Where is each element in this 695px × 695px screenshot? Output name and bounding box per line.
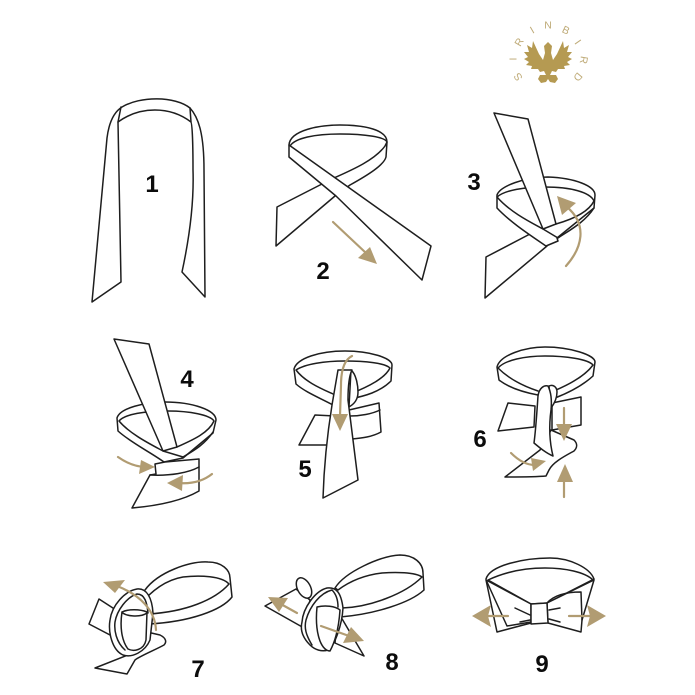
logo wordmark: S bbox=[512, 70, 525, 83]
step 5 bbox=[294, 351, 392, 498]
logo wordmark bbox=[508, 20, 590, 84]
outer ring bbox=[301, 588, 343, 651]
outer ring bbox=[110, 589, 153, 656]
loop behind strip bbox=[349, 370, 358, 407]
logo wordmark: D bbox=[570, 70, 585, 84]
upward strip bbox=[114, 339, 177, 451]
hanging strip bbox=[323, 370, 358, 498]
logo wordmark: I bbox=[528, 25, 537, 37]
step 2 bbox=[276, 125, 431, 285]
logo: Sirinbird bbox=[508, 20, 590, 84]
right wing creases bbox=[549, 608, 560, 622]
center knot bbox=[531, 603, 548, 624]
left fold bbox=[89, 599, 116, 636]
collar band bbox=[294, 351, 392, 405]
curved arrow bbox=[103, 580, 156, 630]
left wing bbox=[486, 580, 531, 632]
number 9: 9 bbox=[535, 651, 549, 678]
loop behind strip bbox=[549, 385, 557, 408]
arrow up bbox=[557, 464, 573, 497]
right arrow bbox=[569, 605, 606, 627]
bottom twisted end bbox=[95, 632, 166, 674]
center knot bbox=[121, 610, 147, 650]
step 1 bbox=[92, 99, 205, 302]
inner ring line bbox=[115, 594, 148, 650]
downward arrow bbox=[332, 356, 352, 431]
right triangle bbox=[335, 612, 364, 656]
arrow down right bbox=[333, 222, 377, 264]
logo wordmark: B bbox=[560, 24, 571, 38]
long loop bbox=[138, 562, 232, 624]
scarf front end bbox=[289, 145, 431, 280]
logo wordmark: I bbox=[572, 38, 583, 47]
upward strip bbox=[494, 113, 556, 229]
left arrow bbox=[472, 605, 508, 627]
neck band edges bbox=[118, 107, 191, 122]
number 1: 1 bbox=[145, 171, 159, 198]
number 6: 6 bbox=[473, 426, 487, 453]
collar band bbox=[497, 347, 595, 398]
long loop bbox=[335, 555, 424, 617]
collar band bbox=[117, 402, 216, 462]
left fold bbox=[299, 415, 335, 445]
logo wordmark: R bbox=[512, 36, 527, 49]
collar inner line bbox=[497, 187, 594, 238]
curved arrow right bbox=[511, 453, 546, 471]
collar band bbox=[289, 125, 387, 146]
arrow down bbox=[556, 408, 572, 441]
left triangle bbox=[265, 589, 310, 628]
step 9 bbox=[472, 558, 606, 678]
number 4: 4 bbox=[180, 366, 194, 393]
lower tail bbox=[485, 234, 547, 298]
knot top fold bbox=[122, 612, 147, 616]
folded end bbox=[132, 459, 199, 508]
step 3 bbox=[467, 113, 595, 298]
collar band bbox=[497, 177, 595, 246]
scarf around neck bbox=[92, 99, 205, 302]
logo wordmark: N bbox=[544, 20, 552, 32]
step 7 bbox=[89, 562, 232, 683]
collar inner line bbox=[119, 411, 214, 457]
number 2: 2 bbox=[316, 258, 330, 285]
right fold line bbox=[350, 410, 380, 416]
step 4 bbox=[114, 339, 216, 508]
right wing bbox=[547, 580, 594, 632]
twisted lower end bbox=[505, 430, 577, 477]
step 6 bbox=[473, 347, 595, 497]
left fold bbox=[498, 403, 535, 431]
small top loop bbox=[293, 575, 315, 601]
number 8: 8 bbox=[385, 649, 399, 676]
right arrow bbox=[167, 474, 212, 491]
curved arrow bbox=[557, 196, 580, 266]
right arrow bbox=[321, 626, 364, 643]
logo wordmark: I bbox=[508, 58, 520, 60]
inner ring line bbox=[305, 590, 338, 645]
left arrow bbox=[268, 597, 297, 613]
collar inner line bbox=[498, 356, 593, 391]
logo wordmark: R bbox=[577, 55, 590, 65]
right fold bbox=[349, 403, 381, 439]
collar band bbox=[486, 558, 594, 604]
collar inner line bbox=[296, 361, 390, 394]
left wing creases bbox=[515, 608, 530, 622]
logo eagle bbox=[524, 41, 572, 83]
left arrow bbox=[118, 457, 155, 474]
fold line bbox=[150, 467, 199, 475]
right wing inner fold bbox=[547, 592, 582, 620]
number 7: 7 bbox=[191, 656, 205, 683]
number 3: 3 bbox=[467, 169, 481, 196]
scarf back end bbox=[276, 142, 387, 246]
vertical loop bbox=[534, 386, 553, 456]
step 8 bbox=[265, 555, 424, 676]
left wing inner line bbox=[487, 582, 531, 626]
center knot bbox=[316, 606, 340, 651]
right fold bbox=[552, 397, 581, 430]
number 5: 5 bbox=[298, 456, 312, 483]
